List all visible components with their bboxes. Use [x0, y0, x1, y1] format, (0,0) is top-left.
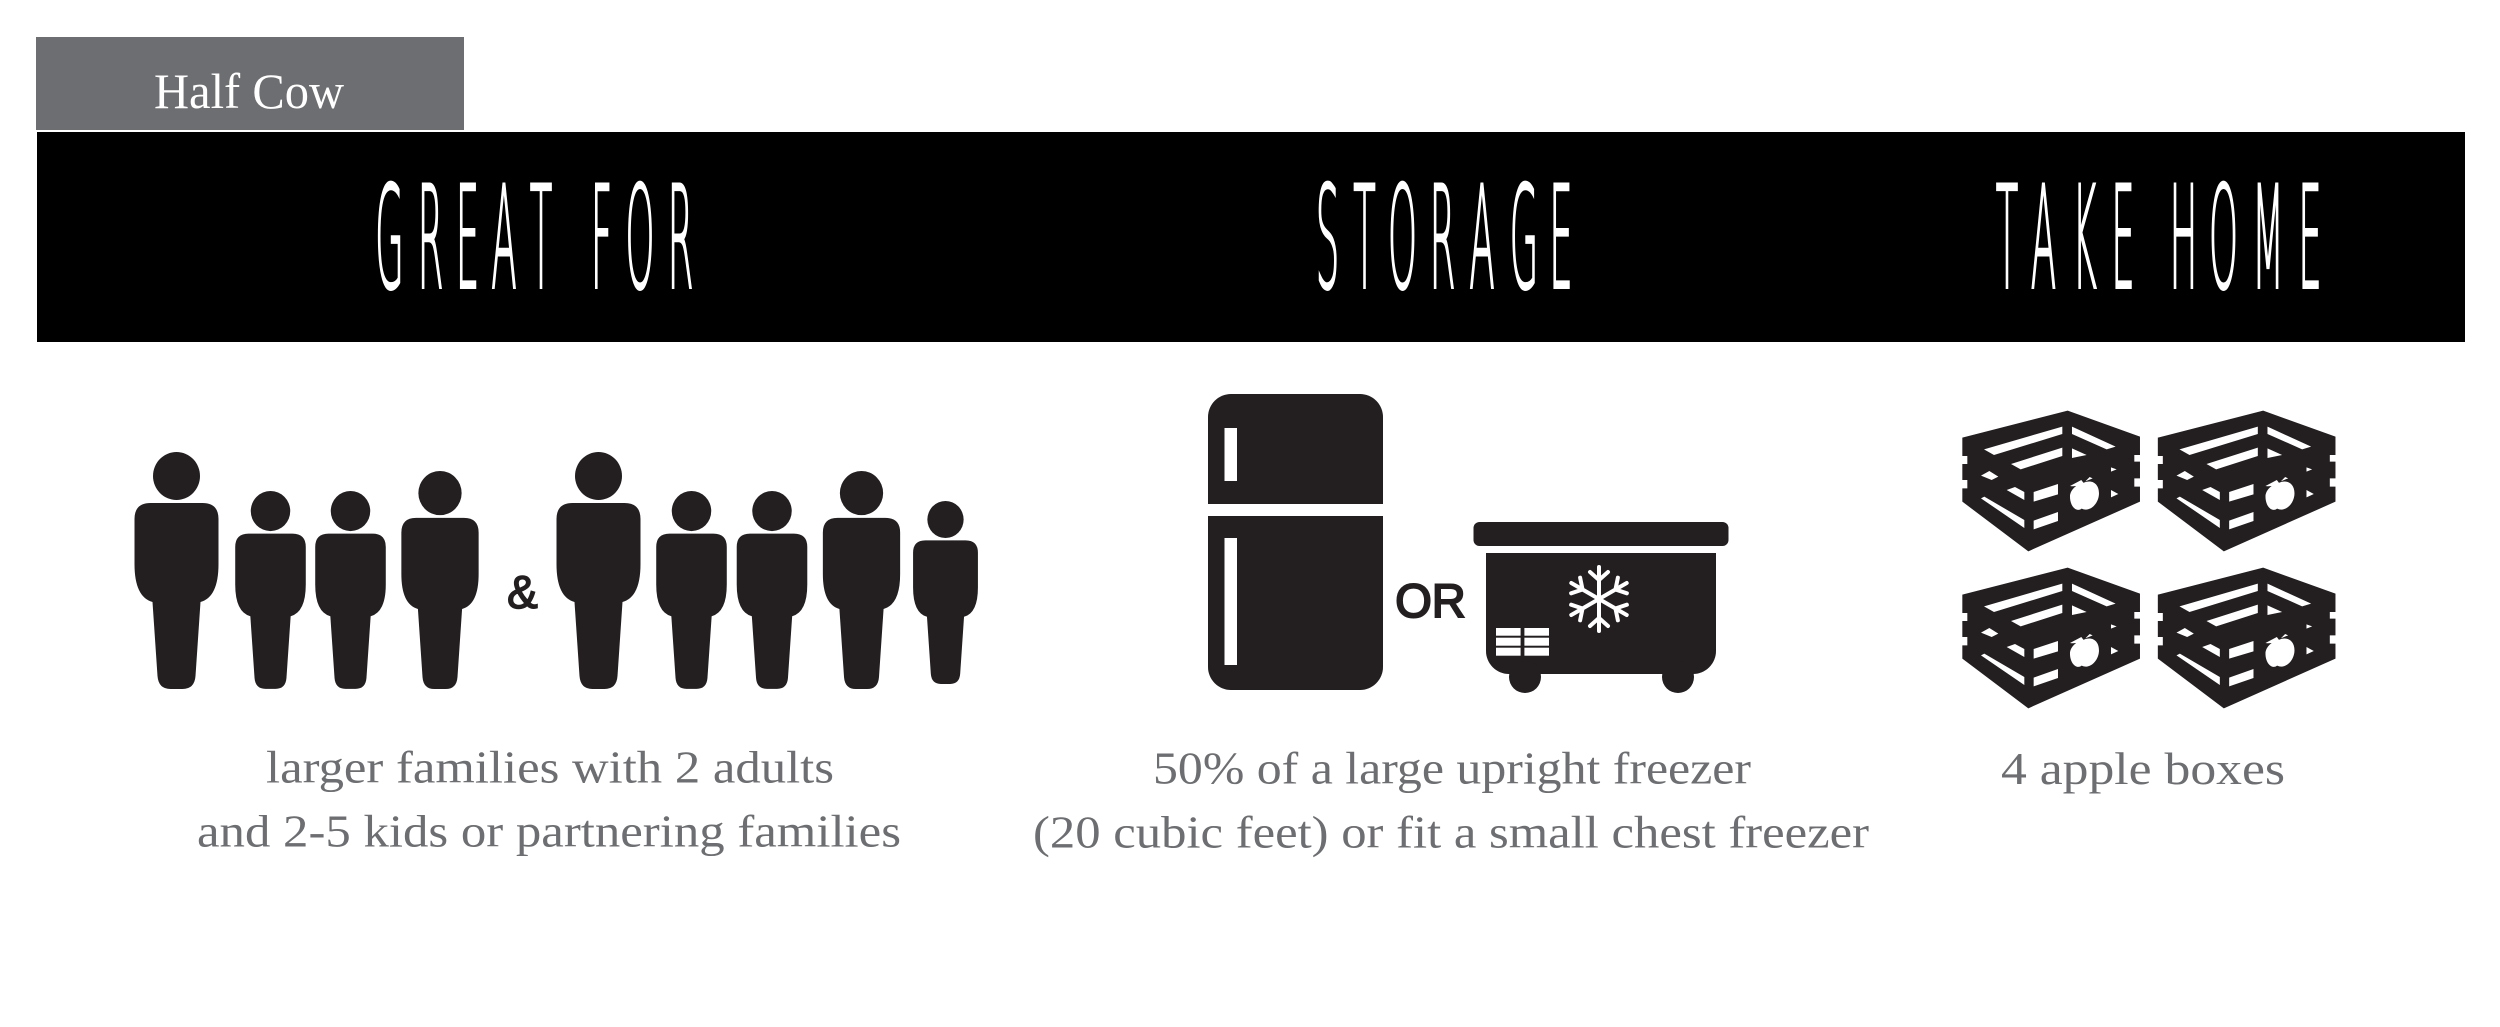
caption: great for: larger families with 2 adults — [266, 742, 834, 792]
caption: storage — [1033, 742, 1869, 858]
panel: storage — [1033, 394, 1869, 858]
heading: storage: STORAGE — [1316, 157, 1573, 322]
label: or: OR — [1395, 574, 1466, 627]
caption: great for — [197, 742, 901, 856]
heading: great for: GREAT FOR — [375, 157, 693, 322]
heading: take home: TAKE HOME — [1996, 157, 2322, 322]
tab: Half Cow — [36, 37, 464, 130]
icon: four apple boxes — [1962, 411, 2335, 708]
icon: family of four — [134, 452, 479, 689]
icon: family of five — [556, 452, 978, 689]
tab: Half Cow: Half Cow — [154, 63, 344, 119]
header band — [37, 132, 2465, 342]
ampersand: & — [507, 566, 538, 618]
caption: take home: 4 apple boxes — [2001, 743, 2285, 794]
icon: upright freezer — [1208, 394, 1383, 690]
panel: take home — [1962, 411, 2335, 794]
caption: great for: and 2-5 kids or partnering families — [197, 806, 901, 856]
caption: storage: (20 cubic feet) or fit a small chest freezer — [1033, 806, 1869, 858]
icon: chest freezer — [1474, 522, 1728, 693]
caption: storage: 50% of a large upright freezer — [1153, 742, 1751, 794]
panel: great for — [134, 452, 978, 856]
